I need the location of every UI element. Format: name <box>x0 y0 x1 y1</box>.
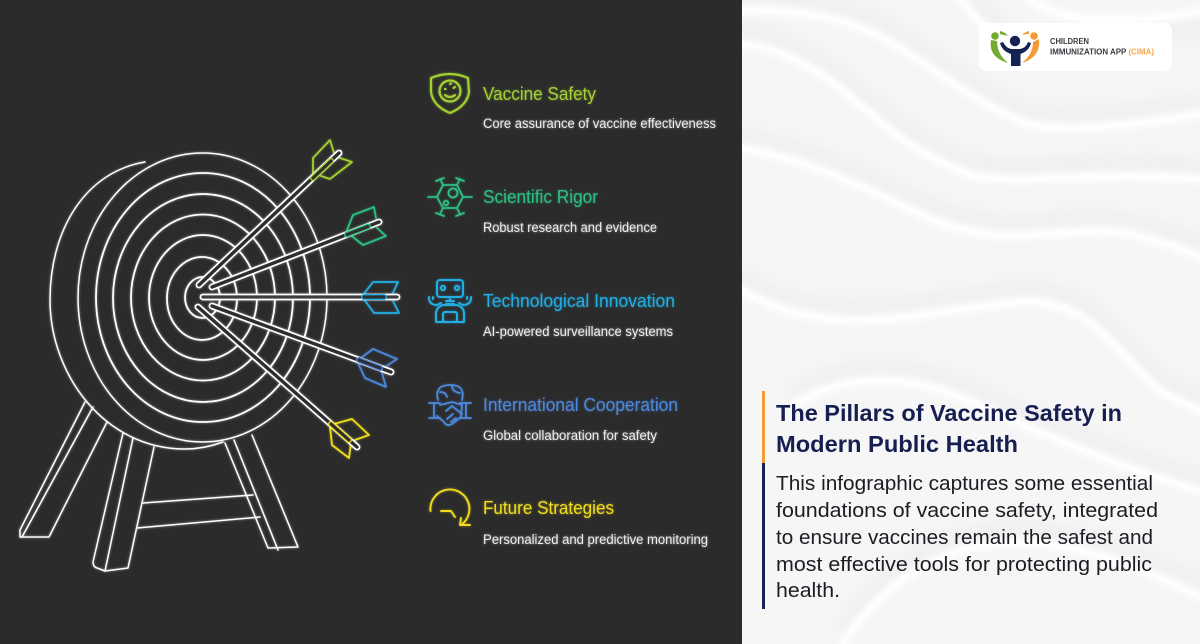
logo text: CHILDREN <box>1050 37 1089 46</box>
description: technological innovation: AI-powered surveillance systems <box>483 324 673 339</box>
body text: health. <box>776 579 840 602</box>
icon: shield with face <box>431 74 469 113</box>
title: The Pillars of Vaccine Safety in <box>776 400 1122 426</box>
pillar: future strategies <box>430 489 708 547</box>
arrow: blue <box>212 306 397 387</box>
panel: dark background <box>0 0 742 644</box>
arrow: green <box>199 140 352 285</box>
icon: globe and handshake <box>429 385 471 425</box>
heading: future strategies: Future Strategies <box>483 498 614 518</box>
target rings <box>50 153 327 449</box>
body text: This infographic captures some essential <box>776 472 1153 495</box>
pillar: technological innovation <box>429 280 675 339</box>
heading: vaccine safety: Vaccine Safety <box>483 84 596 104</box>
icon: robot <box>429 280 471 322</box>
arrow: teal <box>212 207 386 287</box>
logo text <box>1050 37 1154 56</box>
body text: most effective tools for protecting public <box>776 553 1152 576</box>
heading: scientific rigor: Scientific Rigor <box>483 187 598 207</box>
accent bar: orange <box>762 391 765 463</box>
arrow: sky blue <box>203 282 399 313</box>
target stand legs <box>20 402 298 571</box>
pillar list <box>428 74 716 547</box>
title <box>776 400 1122 457</box>
description: vaccine safety: Core assurance of vaccine effectiveness <box>483 116 716 131</box>
body text: to ensure vaccines remain the safest and <box>776 526 1153 549</box>
icon: circular arrow <box>430 489 470 525</box>
pillar: international cooperation <box>429 385 678 443</box>
pillar: scientific rigor <box>428 178 657 235</box>
icon: molecule hexagon <box>428 178 472 216</box>
heading: international cooperation: International Cooperation <box>483 395 678 415</box>
accent bar: navy <box>762 463 765 609</box>
heading: technological innovation: Technological Innovation <box>483 291 675 311</box>
panel: wavy light background <box>735 0 1200 644</box>
icon: logo figure <box>991 31 1039 66</box>
title: Modern Public Health <box>776 431 1018 457</box>
description: future strategies: Personalized and predictive monitoring <box>483 532 708 547</box>
arrow: yellow <box>198 307 369 458</box>
logo card <box>979 23 1172 71</box>
pillar: vaccine safety <box>431 74 716 131</box>
description: international cooperation: Global collaboration for safety <box>483 428 657 443</box>
body text <box>776 472 1158 602</box>
description: scientific rigor: Robust research and evidence <box>483 220 657 235</box>
logo text: IMMUNIZATION APP (CIMA) <box>1050 48 1154 56</box>
target illustration <box>20 140 399 571</box>
body text: foundations of vaccine safety, integrated <box>776 499 1158 522</box>
